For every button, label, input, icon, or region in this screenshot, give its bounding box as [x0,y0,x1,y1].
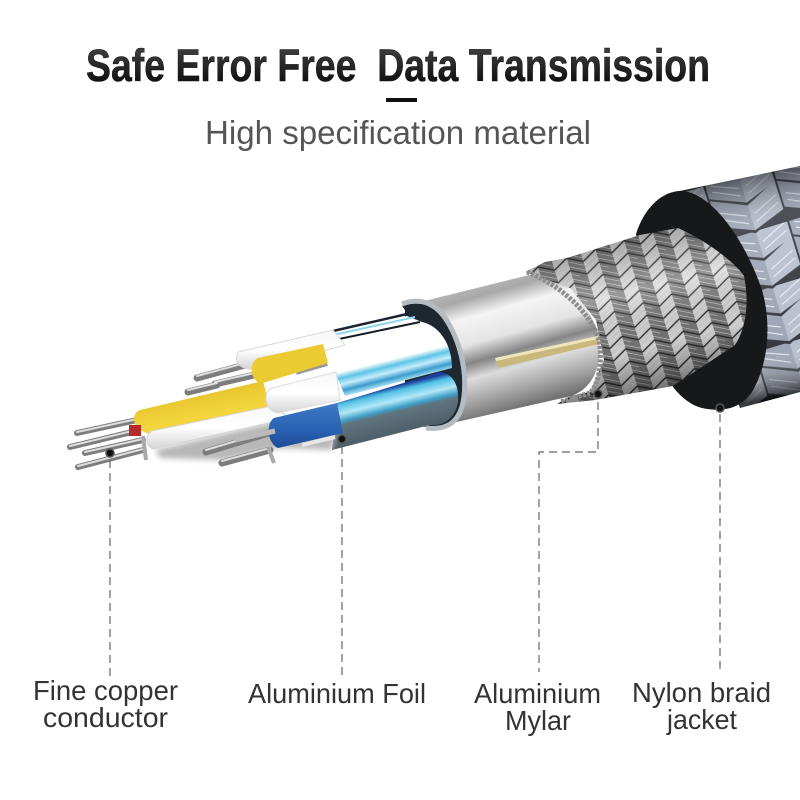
label: nylon braid jacket: Nylon braid [632,677,771,708]
soft shadow under core [155,415,340,460]
upper white core [237,330,345,369]
label: aluminium mylar [474,678,601,736]
label: nylon braid jacket [632,677,771,735]
leader dots [106,390,724,457]
tube opening interior [402,304,462,427]
cable illustration [70,166,800,467]
black jacket end disc [636,191,767,410]
blue core [269,403,343,448]
tube rim [402,301,465,428]
upper yellow core [252,344,328,383]
label: aluminium foil: Aluminium Foil [248,678,426,709]
lower aluminium foil [332,372,458,450]
label: fine copper conductor [33,675,178,733]
long white core [147,406,290,449]
small wire behind core [296,363,327,372]
copper wires [70,363,275,467]
label: nylon braid jacket: jacket [666,704,737,735]
nylon braid jacket [675,166,800,408]
label: fine copper conductor: conductor [43,702,168,733]
label: aluminium mylar: Mylar [505,705,571,736]
silver inner tube [412,273,600,428]
long yellow core [134,381,270,434]
label: aluminium mylar: Aluminium [474,678,601,709]
grey wire in blue core [235,431,275,440]
gold drain wire [495,336,599,368]
white stub under foil [302,437,335,445]
label: fine copper conductor: Fine copper [33,675,178,706]
aluminium mylar braid shield [525,228,747,404]
middle white core [266,372,340,413]
red insulation fragment [129,425,141,436]
frayed shield edge [527,272,600,402]
upper aluminium foil [320,314,452,396]
leader lines [110,402,720,680]
subtitle: High specification material [205,114,591,151]
core collars [143,436,146,460]
title divider [386,98,417,102]
